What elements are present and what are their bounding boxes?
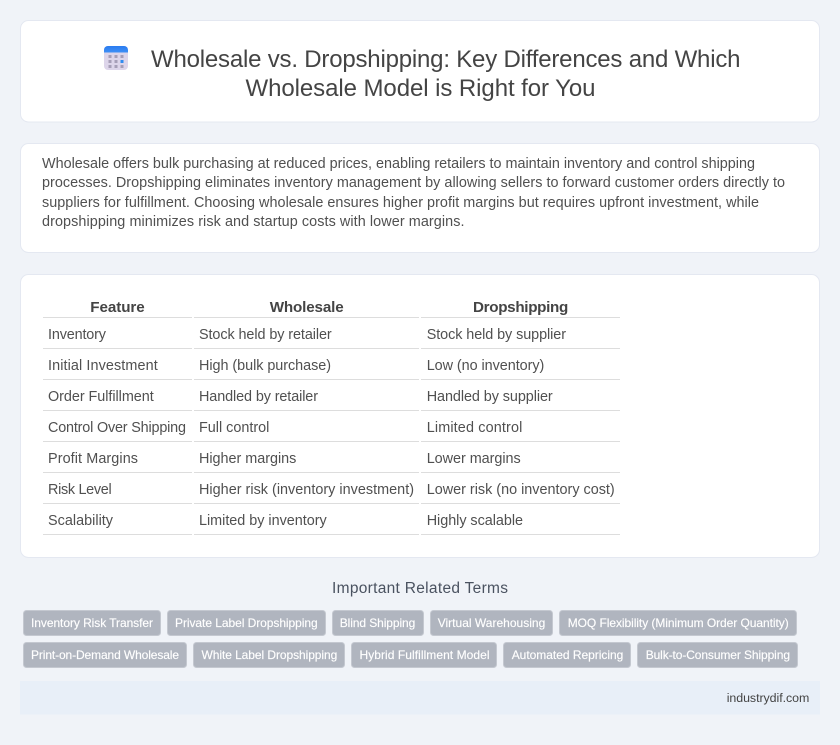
table row: Control Over Shipping: Limited control [427, 420, 522, 436]
tag: Private Label Dropshipping: Private Label Dropshipping [175, 616, 318, 630]
table row: Initial Investment: High (bulk purchase) [199, 358, 331, 374]
tag: MOQ Flexibility [560, 610, 796, 636]
footer bar [20, 681, 820, 714]
table row: Initial Investment [43, 358, 620, 380]
tag: MOQ Flexibility: MOQ Flexibility (Minimum Order Quantity) [568, 616, 789, 630]
text block: introduction paragraph [42, 156, 785, 230]
tag: Private Label Dropshipping [168, 610, 326, 636]
heading: title: Wholesale vs. Dropshipping: Key Differences and Which [151, 46, 740, 73]
text block: introduction paragraph: dropshipping minimizes risk and startup costs with lower margins. [42, 214, 464, 230]
table header row [43, 299, 620, 318]
tag: Hybrid Fulfillment Model: Hybrid Fulfillment Model [360, 648, 490, 662]
panel: introduction [20, 144, 820, 252]
table row: Inventory [43, 327, 620, 349]
table row: Risk Level [43, 482, 620, 504]
table row: Scalability [43, 513, 620, 535]
tag: Print-on-Demand Wholesale: Print-on-Demand Wholesale [31, 648, 179, 662]
table row: Scalability: Limited by inventory [199, 513, 327, 529]
table row: Inventory: Inventory [48, 327, 107, 343]
table row: Initial Investment: Low (no inventory) [427, 358, 544, 374]
table row: Risk Level: Higher risk (inventory investment) [199, 482, 414, 498]
table row: Risk Level: Risk Level [48, 482, 112, 498]
heading: title [151, 46, 740, 102]
table row: Risk Level: Lower risk (no inventory cost) [427, 482, 615, 498]
tag: White Label Dropshipping [194, 642, 344, 668]
table row: Inventory: Stock held by retailer [199, 327, 332, 343]
table row: Initial Investment: Initial Investment [48, 358, 158, 374]
table header row: Dropshipping [473, 299, 568, 316]
panel: title header [20, 20, 820, 122]
table row: Control Over Shipping [43, 420, 620, 442]
panel: comparison table [20, 274, 820, 558]
text block: introduction paragraph: Wholesale offers bulk purchasing at reduced prices, enabling retailers to maintain inventory and control shipping [42, 156, 755, 172]
table row: Scalability: Scalability [48, 513, 114, 529]
tag: Automated Repricing [504, 642, 630, 668]
tag: Hybrid Fulfillment Model [352, 642, 496, 668]
tag: Blind Shipping: Blind Shipping [340, 616, 415, 630]
table row: Order Fulfillment: Handled by supplier [427, 389, 553, 405]
table row: Scalability: Highly scalable [427, 513, 523, 529]
tag: Virtual Warehousing: Virtual Warehousing [438, 616, 545, 630]
table header row: Feature [90, 299, 145, 316]
tag: White Label Dropshipping: White Label Dropshipping [202, 648, 337, 662]
tag: Inventory Risk Transfer: Inventory Risk Transfer [31, 616, 153, 630]
tag: Bulk-to-Consumer Shipping: Bulk-to-Consumer Shipping [646, 648, 790, 662]
icon: calendar [104, 46, 128, 70]
text block: introduction paragraph: suppliers for fulfillment. Choosing wholesale ensures higher profit margins but requires upfront investment, while [42, 195, 759, 211]
heading: title: Wholesale Model is Right for You [246, 75, 596, 102]
heading: Important Related Terms: Important Related Terms [332, 580, 508, 597]
tag: Bulk-to-Consumer Shipping [638, 642, 798, 668]
tag: Blind Shipping [332, 610, 424, 636]
table row: Control Over Shipping: Full control [199, 420, 269, 436]
table row: Control Over Shipping: Control Over Shipping [48, 420, 186, 436]
related terms tags [24, 610, 798, 668]
table row: Inventory: Stock held by supplier [427, 327, 566, 343]
table row: Profit Margins: Profit Margins [48, 451, 138, 467]
tag: Virtual Warehousing [430, 610, 552, 636]
tag: Inventory Risk Transfer [24, 610, 160, 636]
table header row: Wholesale [270, 299, 344, 316]
footer source text: industrydif.com [727, 691, 809, 705]
tag: Automated Repricing: Automated Repricing [512, 648, 623, 662]
table row: Order Fulfillment: Order Fulfillment [48, 389, 154, 405]
table row: Profit Margins [43, 451, 620, 473]
tag: Print-on-Demand Wholesale [24, 642, 186, 668]
table row: Profit Margins: Lower margins [427, 451, 521, 467]
text block: introduction paragraph: processes. Dropshipping eliminates inventory management by allowing sellers to forward customer orders directly to [42, 175, 785, 191]
table row: Order Fulfillment [43, 389, 620, 411]
table row: Order Fulfillment: Handled by retailer [199, 389, 318, 405]
table row: Profit Margins: Higher margins [199, 451, 296, 467]
